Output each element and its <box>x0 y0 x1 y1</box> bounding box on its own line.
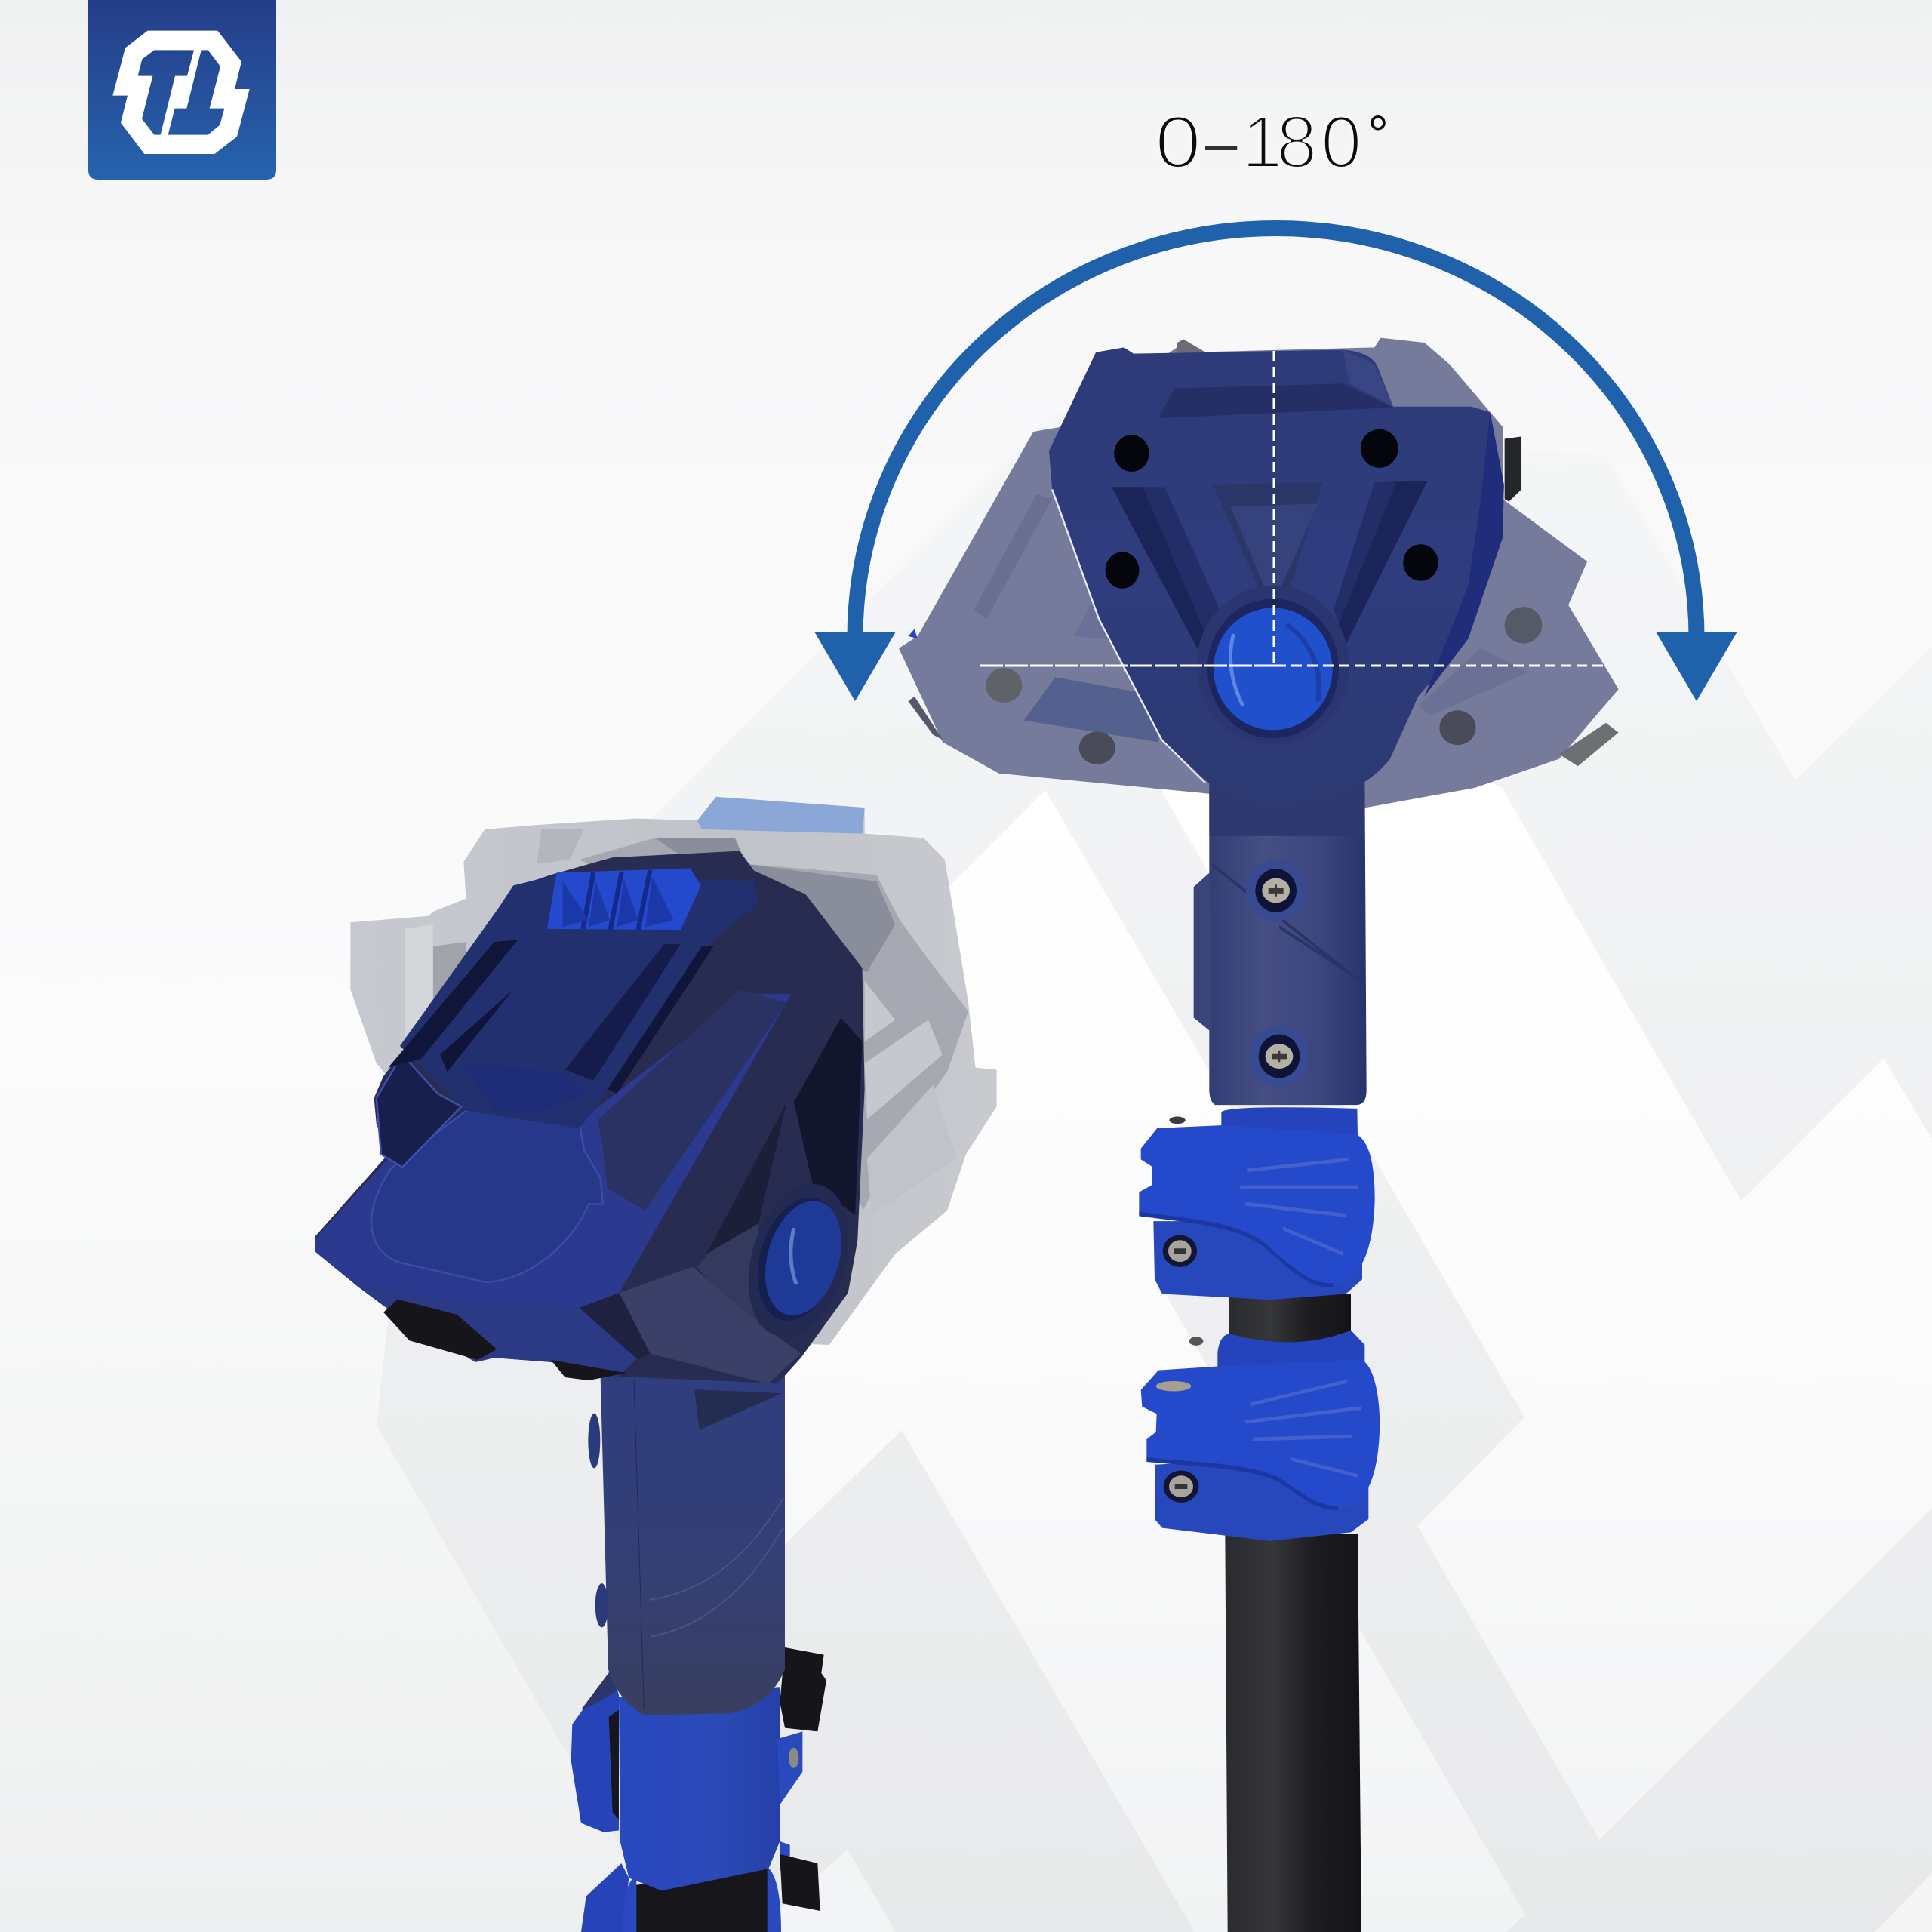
angle label: – <box>1205 112 1238 176</box>
lower clamp <box>1141 1331 1380 1541</box>
angle label: ° <box>1367 105 1389 164</box>
side pivot button <box>732 1174 865 1346</box>
dashed rotation axes <box>980 351 1603 666</box>
side knobs <box>571 1647 826 1911</box>
rotation arc arrow <box>814 229 1737 701</box>
angle label: 1 <box>1241 100 1283 183</box>
top recess <box>1158 383 1393 418</box>
holes <box>1106 429 1438 589</box>
logo mark TL <box>112 31 250 154</box>
ribs <box>1112 481 1428 658</box>
dark side body <box>315 851 865 1384</box>
pole segment <box>1225 1294 1361 1932</box>
angle label: 8 <box>1276 100 1318 183</box>
right tool: ghost rotated head <box>899 338 1619 810</box>
upper clamp <box>1139 1107 1375 1300</box>
blue latch <box>547 869 701 930</box>
logo badge <box>88 0 276 180</box>
lower ring and pole <box>581 1863 781 1932</box>
collar <box>619 1687 780 1890</box>
left tool: neck and collar <box>571 1358 826 1932</box>
angle label: 0 <box>1321 100 1362 183</box>
front plate <box>315 994 792 1310</box>
black latch nub <box>383 1300 497 1360</box>
triangle recess and side facets <box>620 1018 862 1384</box>
left tool: ghost rotated positions <box>350 797 997 1345</box>
neck cylinder <box>600 1358 785 1715</box>
battery tongue <box>371 1111 603 1282</box>
right tool: main head <box>1049 347 1504 807</box>
neck housing <box>1194 771 1367 1105</box>
angle label: 0 <box>1155 100 1201 183</box>
left tool: main head <box>315 851 865 1384</box>
pivot button <box>1197 586 1349 745</box>
right tool: neck, clamps and pole <box>1139 771 1380 1932</box>
battery slide <box>377 875 758 1168</box>
